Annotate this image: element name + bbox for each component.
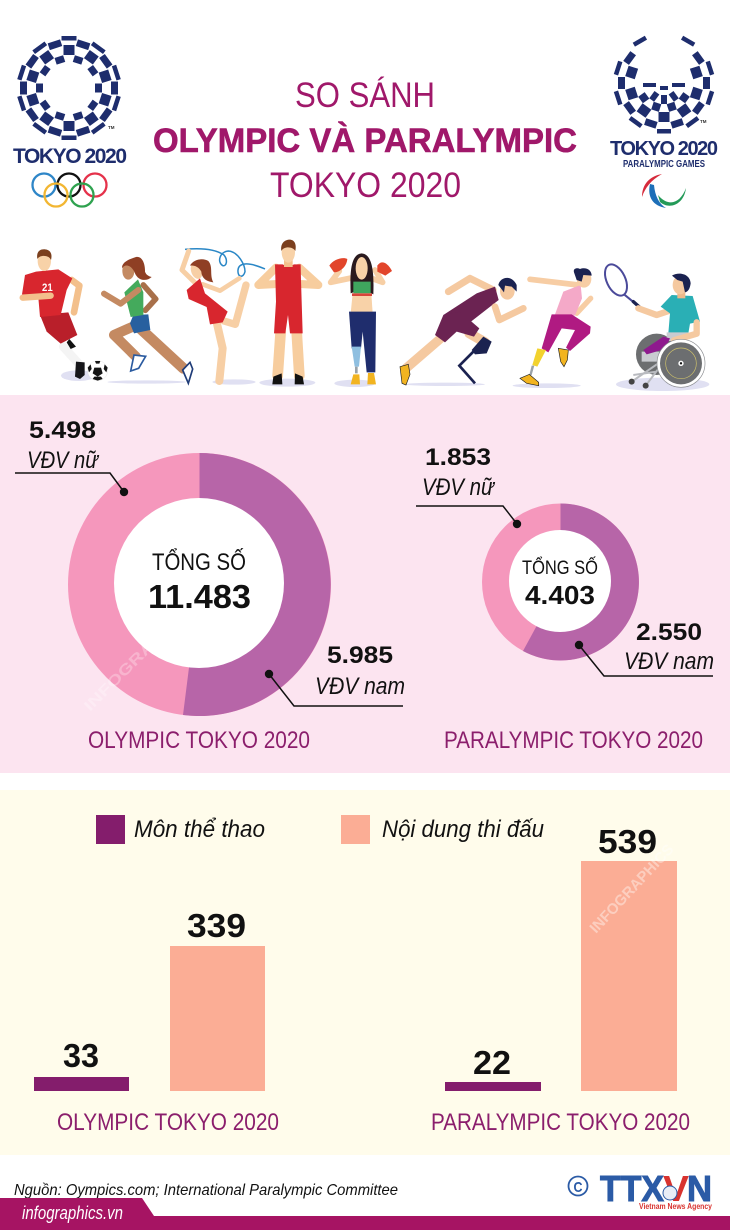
label: Olympic donut caption: OLYMPIC TOKYO 2020 bbox=[88, 727, 310, 754]
label: total: TỔNG SỐ bbox=[152, 548, 246, 576]
icon: male athlete bbox=[258, 240, 318, 387]
callout: Olympic women: VĐV nữ bbox=[27, 447, 99, 474]
callout: Olympic men bbox=[265, 642, 405, 706]
legend: events: Nội dung thi đấu bbox=[382, 816, 544, 843]
logo: TTXVN: N bbox=[687, 1168, 712, 1209]
icon: female boxer with prosthetic leg bbox=[329, 253, 383, 387]
title: SO SÁNH bbox=[295, 76, 435, 115]
icon: checkered fan bbox=[614, 36, 714, 134]
title: TOKYO 2020 bbox=[270, 166, 461, 205]
bar chart: Paralympic: 22 bbox=[473, 1044, 511, 1081]
bar chart: Paralympic: PARALYMPIC TOKYO 2020 bbox=[431, 1109, 690, 1136]
chart: Olympic donut bbox=[68, 453, 331, 716]
icon: checkered ring bbox=[17, 36, 121, 140]
panel: sports and events bbox=[0, 790, 730, 1155]
icon: soccer player bbox=[22, 249, 108, 381]
illustration: row of athletes, left group bbox=[22, 240, 383, 387]
logo: TTXVN: V bbox=[663, 1168, 689, 1209]
footer bar with tab bbox=[0, 1198, 730, 1230]
icon: sprinter with running blade bbox=[400, 278, 523, 386]
illustration: row of athletes, right group bbox=[377, 261, 709, 391]
callout: Paralympic men bbox=[575, 619, 714, 676]
footer bbox=[0, 1168, 730, 1230]
bar chart: Paralympic: 539 bbox=[598, 823, 657, 860]
label: total: TỔNG SỐ bbox=[522, 557, 598, 579]
logo wordmark: Tokyo 2020: TOKYO 2020 bbox=[13, 145, 127, 168]
icon: copyright bbox=[568, 1176, 588, 1196]
logo: TTXVN: Vietnam News Agency bbox=[639, 1202, 712, 1211]
callout: Olympic men: 5.985 bbox=[327, 642, 393, 669]
panel: athletes count bbox=[0, 395, 730, 773]
callout: Paralympic men: VĐV nam bbox=[624, 648, 714, 675]
text: source: Nguồn: Oympics.com; International Paralympic Committee bbox=[14, 1182, 398, 1199]
logo wordmark: Tokyo 2020: TOKYO 2020 bbox=[610, 138, 718, 160]
bar chart: Olympic bbox=[34, 907, 279, 1136]
icon: soccer player: 21 bbox=[42, 282, 53, 294]
logo: TTXVN: TTX bbox=[600, 1168, 664, 1209]
legend: sports bbox=[96, 815, 265, 844]
bar chart: Paralympic bbox=[431, 823, 690, 1136]
chart: Olympic donut: INFOGRA bbox=[81, 638, 158, 715]
label: total bbox=[522, 557, 598, 610]
logo: Tokyo 2020 Olympic emblem bbox=[13, 36, 127, 206]
legend: sports: Môn thể thao bbox=[134, 816, 265, 843]
logo caption: Paralympic Games: PARALYMPIC GAMES bbox=[623, 159, 705, 170]
callout: Paralympic women: VĐV nữ bbox=[422, 474, 496, 501]
icon: Olympic rings bbox=[32, 174, 106, 206]
bar chart: Olympic: 339 bbox=[187, 907, 246, 944]
trademark mark: TM bbox=[108, 125, 115, 130]
icon: soccer ball bbox=[88, 361, 108, 381]
callout: Paralympic women bbox=[416, 444, 521, 528]
logo: TTXVN bbox=[600, 1168, 712, 1211]
trademark mark: TM bbox=[700, 119, 707, 124]
icon: woman runner bbox=[104, 257, 193, 384]
icon: boxer right glove bbox=[377, 262, 392, 276]
callout: Olympic women bbox=[15, 417, 128, 496]
icon: copyright: C bbox=[574, 1179, 583, 1196]
footer bar with tab: infographics.vn bbox=[22, 1203, 123, 1223]
icon: wheelchair tennis player bbox=[600, 261, 709, 391]
title: OLYMPIC VÀ PARALYMPIC bbox=[153, 122, 577, 160]
label: total: 4.403 bbox=[525, 580, 595, 610]
callout: Paralympic men: 2.550 bbox=[636, 619, 702, 646]
icon: Paralympic agitos bbox=[642, 174, 686, 208]
callout: Olympic women: 5.498 bbox=[29, 417, 96, 444]
bar chart: Paralympic: INFOGRAPHICS bbox=[586, 841, 677, 937]
label: total: 11.483 bbox=[148, 578, 251, 615]
icon: rhythmic gymnast with ribbon bbox=[182, 249, 265, 385]
title bbox=[153, 76, 577, 205]
logo: Tokyo 2020 Paralympic emblem bbox=[610, 36, 718, 208]
callout: Olympic men: VĐV nam bbox=[315, 673, 405, 700]
bar chart: Olympic: OLYMPIC TOKYO 2020 bbox=[57, 1109, 279, 1136]
bar chart: Olympic: 33 bbox=[63, 1037, 99, 1074]
icon: female sprinter with prosthetic leg bbox=[513, 268, 592, 388]
chart: Paralympic donut bbox=[482, 504, 639, 660]
callout: Paralympic women: 1.853 bbox=[425, 444, 491, 471]
label: total bbox=[148, 548, 251, 615]
